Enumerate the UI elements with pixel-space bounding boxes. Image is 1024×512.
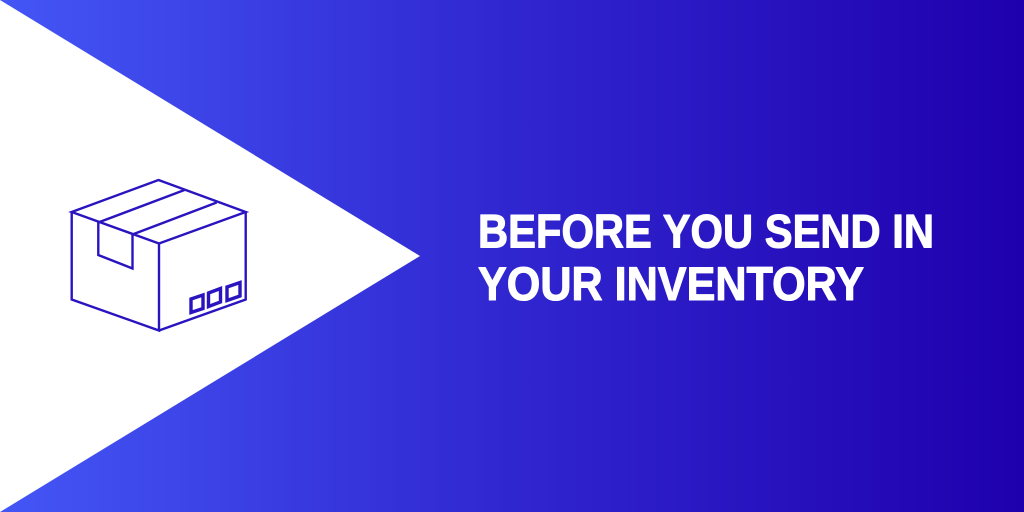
heading line 2: YOUR INVENTORY xyxy=(478,257,864,310)
box top face xyxy=(72,180,246,244)
white triangle panel xyxy=(0,0,420,512)
icon: cardboard box xyxy=(72,180,246,330)
box left face xyxy=(72,212,159,330)
heading xyxy=(478,204,934,310)
box right face xyxy=(159,212,246,330)
heading line 1: BEFORE YOU SEND IN xyxy=(478,204,934,258)
packing tape xyxy=(98,190,217,268)
handling marks xyxy=(191,282,240,312)
